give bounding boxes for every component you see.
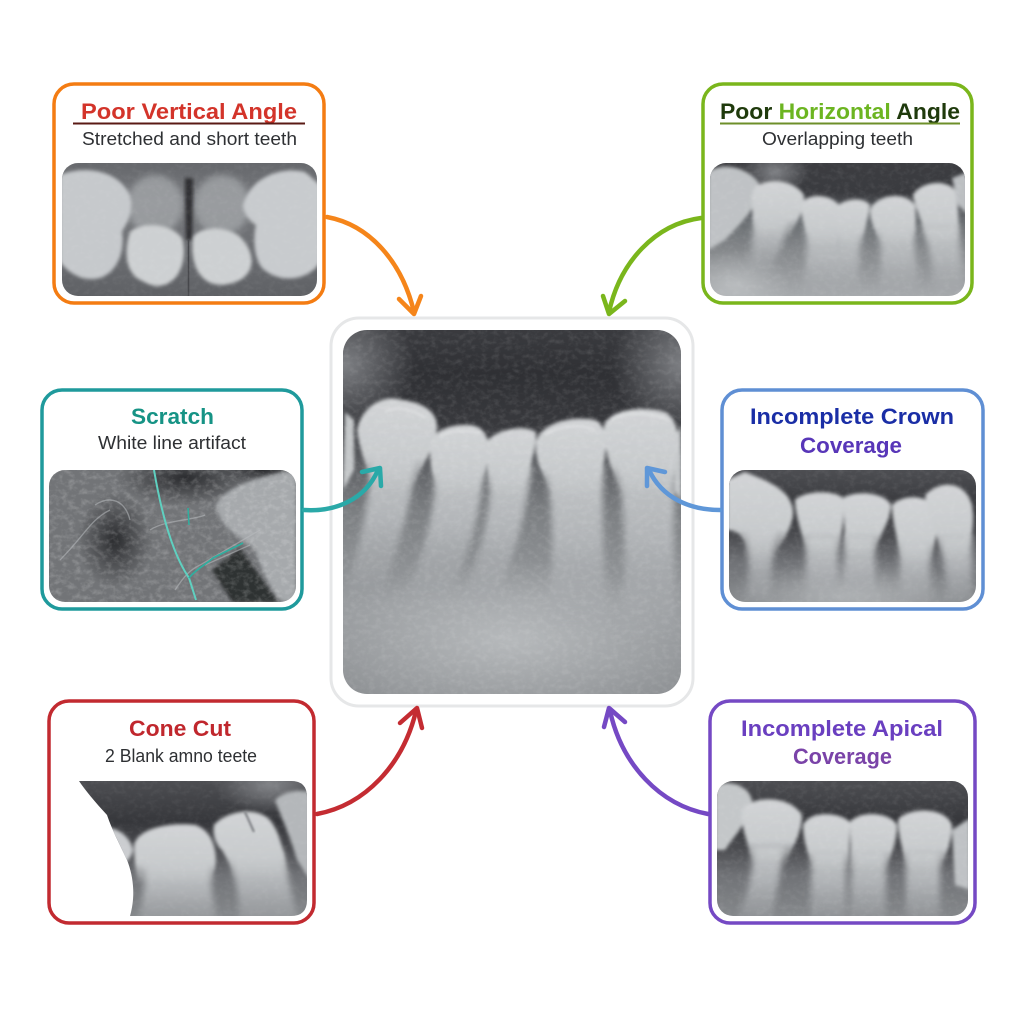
arrow: purple: [604, 708, 708, 814]
subtitle: White line artifact: [98, 433, 246, 453]
heading: scratch: Scratch: [131, 404, 214, 429]
heading: poor vertical angle: Poor Vertical Angle: [81, 99, 297, 124]
x-ray image: [710, 163, 965, 296]
subtitle: Overlapping teeth: [762, 129, 913, 149]
arrow: red: [317, 708, 422, 814]
panel: poor vertical angle: [54, 84, 324, 303]
arrow: teal: [304, 468, 381, 510]
central x-ray image: [343, 330, 681, 694]
x-ray image: [49, 470, 296, 602]
subtitle: 2 Blank amno teete: [105, 746, 257, 766]
panel: poor horizontal angle: [701, 82, 974, 305]
heading: coverage: Coverage: [800, 433, 902, 458]
panel: scratch: [42, 390, 307, 609]
subtitle: Stretched and short teeth: [82, 129, 297, 149]
x-ray image: [79, 781, 307, 916]
heading: poor horizontal angle: Poor Horizontal Angle: [720, 99, 960, 124]
x-ray image: [715, 781, 970, 925]
arrow: orange: [327, 217, 421, 314]
central x-ray frame: [330, 316, 694, 708]
x-ray image: [729, 470, 976, 602]
panel: incomplete apical coverage: [710, 701, 975, 925]
arrow: blue: [647, 468, 720, 510]
panel: incomplete crown coverage: [720, 390, 983, 630]
panel: cone cut: [49, 701, 325, 930]
heading: incomplete crown: Incomplete Crown: [750, 404, 954, 429]
heading underline: [73, 122, 305, 124]
heading: incomplete apical: Incomplete Apical: [741, 716, 943, 741]
x-ray image: [60, 163, 320, 296]
heading: cone cut: Cone Cut: [129, 716, 232, 741]
heading underline: [720, 122, 960, 124]
arrow: green: [603, 218, 701, 314]
heading: coverage: Coverage: [793, 744, 892, 769]
